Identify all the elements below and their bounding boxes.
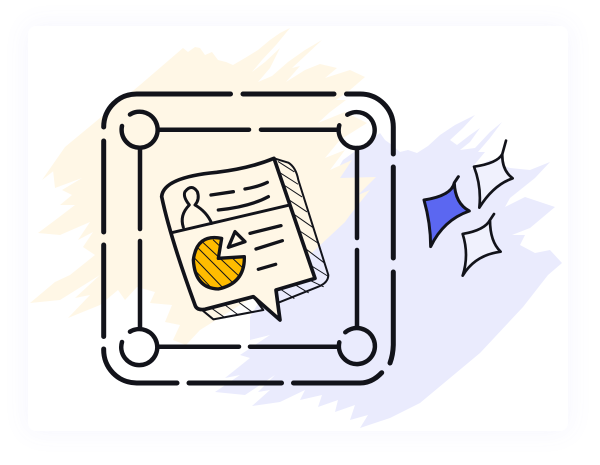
sparkles: [424, 141, 513, 276]
person icon: [182, 187, 212, 227]
node: bottom left: [121, 329, 157, 365]
lavender brush stroke background: [215, 115, 562, 428]
sparkle: blue: [424, 177, 469, 247]
dashed outer frame: [104, 94, 393, 383]
bubble front: [162, 158, 315, 320]
sparkle: lower outline: [463, 214, 501, 276]
inner frame with corner nodes: [121, 112, 375, 365]
pie chart: [190, 235, 247, 290]
header text lines: [211, 182, 268, 210]
small triangle: [228, 232, 245, 247]
node: top left: [122, 112, 158, 148]
illustration: [30, 28, 562, 428]
bubble 3D side: [200, 158, 328, 319]
side hatching: [212, 162, 328, 318]
panel: white card: [28, 26, 568, 431]
node: top right: [339, 112, 375, 148]
cream brush stroke background: [30, 28, 376, 345]
node: bottom right: [339, 328, 375, 364]
divider: [172, 205, 288, 233]
sparkle: upper outline: [474, 141, 513, 208]
body text lines: [250, 226, 282, 269]
document speech bubble with chart: [162, 158, 328, 320]
